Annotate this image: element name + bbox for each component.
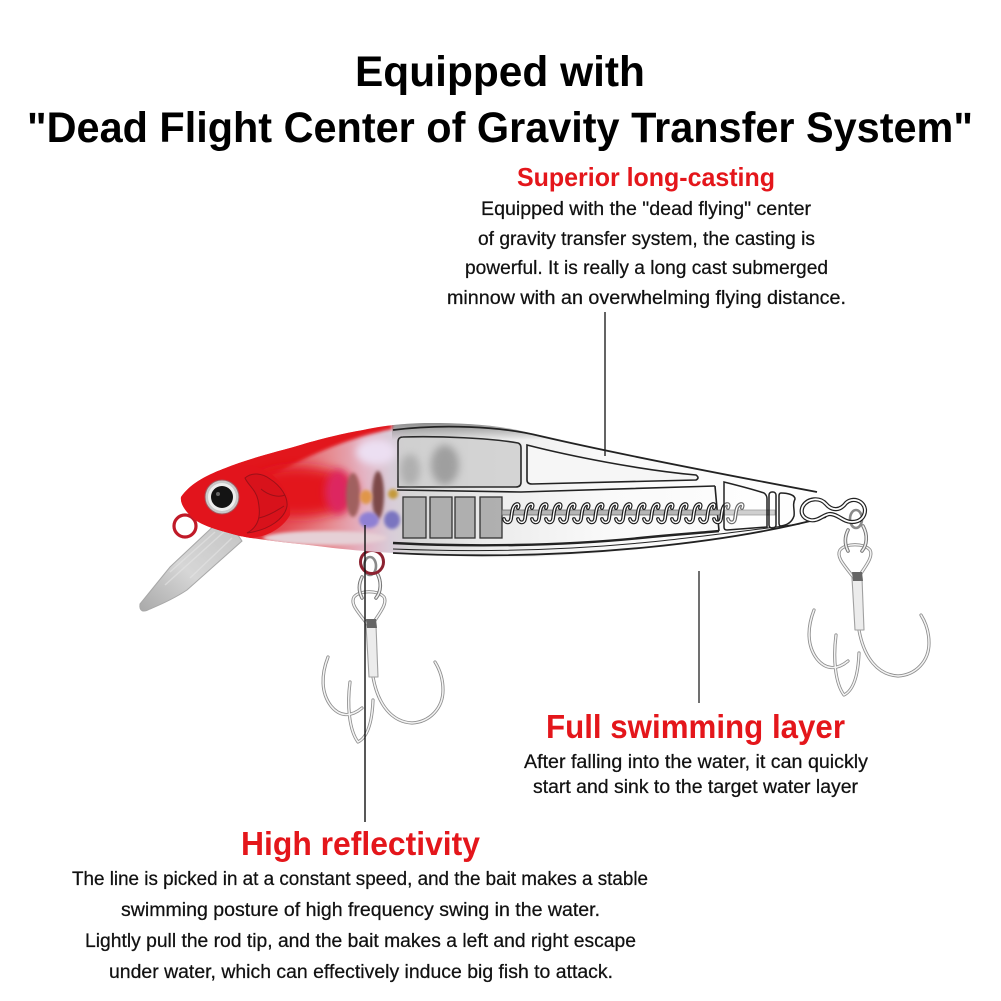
text block: reflectivity description: under water, which can effectively induce big fish to attack. (109, 962, 613, 983)
text block: reflectivity description: The line is picked in at a constant speed, and the bait makes a stable (72, 869, 648, 890)
spring (504, 504, 743, 522)
title: "Dead Flight Center of Gravity Transfer System" (27, 104, 973, 152)
belly treble hook (323, 557, 443, 742)
text block: reflectivity description: Lightly pull the rod tip, and the bait makes a left and right escape (85, 931, 636, 952)
text block: long-casting description: powerful. It is really a long cast submerged (465, 258, 828, 279)
tail compartments (724, 482, 795, 530)
heading: superior long-casting: Superior long-casting (517, 162, 775, 192)
text block: reflectivity description (72, 869, 648, 983)
leader line: swimming layer (698, 571, 700, 703)
illustration: fishing lure (140, 415, 929, 742)
heading: full swimming layer: Full swimming layer (546, 708, 845, 745)
callout: high reflectivity (72, 825, 648, 983)
front chamber (398, 437, 521, 487)
title: Equipped with (355, 48, 645, 96)
text block: long-casting description (447, 199, 846, 309)
rod (502, 510, 775, 515)
nose ring (174, 515, 196, 537)
leader line: long-casting (604, 312, 606, 456)
callout: superior long-casting (447, 162, 846, 309)
gill plate (245, 474, 287, 533)
callout: full swimming layer (524, 708, 869, 798)
text block: swimming description: After falling into the water, it can quickly (524, 752, 869, 773)
heading: high reflectivity: High reflectivity (241, 825, 481, 862)
rear treble hook (809, 510, 929, 695)
eye (205, 480, 239, 514)
lure body (180, 423, 586, 558)
leader line: reflectivity (364, 525, 366, 822)
text block: long-casting description: minnow with an overwhelming flying distance. (447, 288, 846, 309)
rear upper chamber (527, 445, 698, 484)
text block: swimming description (524, 752, 869, 798)
text block: long-casting description: of gravity transfer system, the casting is (478, 229, 815, 250)
body wall lines (393, 427, 826, 555)
text block: long-casting description: Equipped with the "dead flying" center (481, 199, 812, 220)
diving lip (140, 520, 242, 611)
title (27, 48, 973, 152)
tail swivel (802, 499, 865, 522)
weight balls (403, 497, 502, 538)
text block: reflectivity description: swimming posture of high frequency swing in the water. (121, 900, 600, 921)
text block: swimming description: start and sink to the target water layer (533, 777, 859, 798)
belly hook ring (360, 550, 384, 574)
